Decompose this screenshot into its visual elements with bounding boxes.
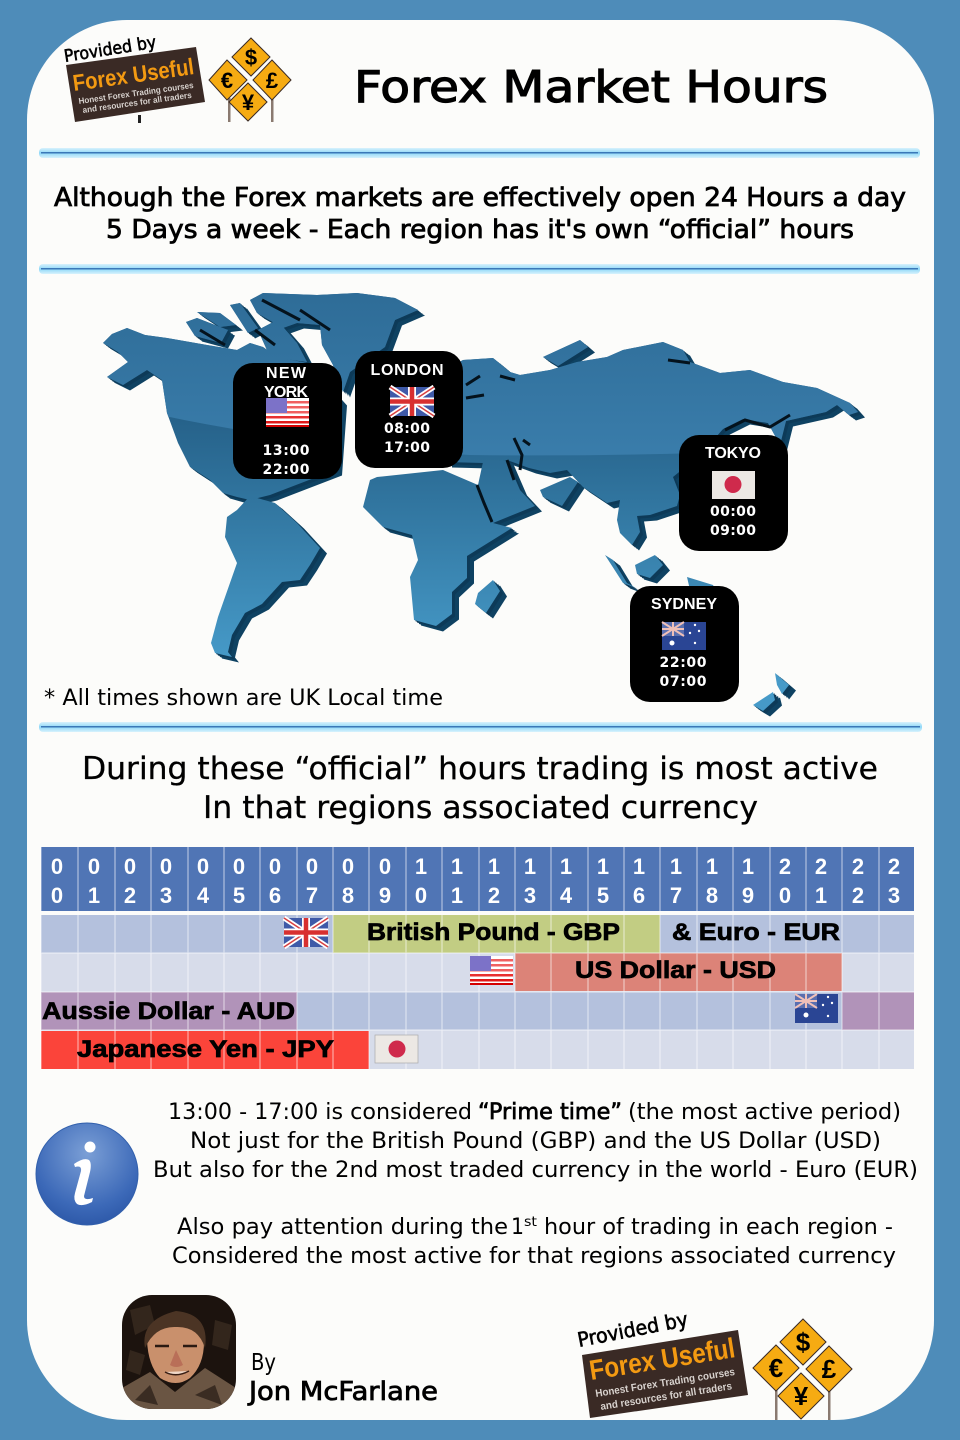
section heading: During these “official” hours trading is most active <box>82 751 878 787</box>
header row: 0 <box>233 854 245 879</box>
logo: Forex Useful bottom: € <box>769 1353 783 1383</box>
city card: New York: YORK <box>264 384 308 401</box>
city card: New York: 22:00 <box>262 462 310 478</box>
icon: information <box>36 1123 138 1225</box>
flag: USA <box>266 398 309 427</box>
author credit <box>247 1350 438 1407</box>
logo: Forex Useful bottom: and resources for all traders <box>600 1380 733 1413</box>
title: Forex Market Hours <box>354 62 828 113</box>
header row: 0 <box>269 854 281 879</box>
flag: Japan <box>712 471 755 499</box>
info text: Not just for the British Pound (GBP) and the US Dollar (USD) <box>190 1129 881 1154</box>
city card: New York <box>233 363 342 479</box>
label: EUR: & Euro - EUR <box>672 919 840 946</box>
header row: 0 <box>306 854 318 879</box>
author credit: Jon McFarlane <box>247 1377 438 1407</box>
trading hours chart <box>41 847 914 1069</box>
header row: 1 <box>597 854 609 879</box>
header row: 1 <box>633 854 645 879</box>
logo: Forex Useful top: ¥ <box>242 90 255 115</box>
header row: 3 <box>160 883 172 908</box>
author photo <box>122 1295 236 1409</box>
header row: 2 <box>779 854 791 879</box>
label: USD: US Dollar - USD <box>575 957 776 984</box>
flag: USA row <box>470 956 513 985</box>
logo: Forex Useful bottom: ¥ <box>794 1381 809 1411</box>
info text: “Prime time” <box>478 1100 622 1125</box>
info text: 13:00 - 17:00 is considered <box>168 1100 472 1125</box>
logo: Forex Useful top: Provided by <box>63 33 158 67</box>
city card: London: LONDON <box>370 362 444 379</box>
row backgrounds and bars <box>41 915 914 1069</box>
info text: st <box>524 1215 537 1230</box>
header row: 2 <box>124 883 136 908</box>
header row: 5 <box>233 883 245 908</box>
label: AUD: Aussie Dollar - AUD <box>42 998 295 1025</box>
header row: 0 <box>124 854 136 879</box>
header row: 0 <box>779 883 791 908</box>
divider two <box>39 264 920 274</box>
logo: Forex Useful top: $ <box>245 45 257 70</box>
label: JPY: Japanese Yen - JPY <box>77 1036 334 1063</box>
header row <box>41 847 914 911</box>
header row: 1 <box>451 854 463 879</box>
city card: London <box>355 351 463 468</box>
author credit: By <box>251 1350 276 1376</box>
header row: 9 <box>742 883 754 908</box>
logo: Forex Useful bottom <box>575 1307 852 1420</box>
world map <box>103 293 865 716</box>
logo: Forex Useful top: Honest Forex Trading courses <box>78 80 194 106</box>
header row: 1 <box>742 854 754 879</box>
header row: 7 <box>306 883 318 908</box>
logo: Forex Useful bottom: £ <box>822 1354 837 1384</box>
header row: 8 <box>342 883 354 908</box>
info text: Also pay attention during the <box>177 1215 508 1240</box>
header row: 1 <box>488 854 500 879</box>
logo: Forex Useful top <box>63 33 291 123</box>
header row: 2 <box>852 883 864 908</box>
header row: 2 <box>852 854 864 879</box>
header row: 4 <box>197 883 210 908</box>
header row: 1 <box>88 883 100 908</box>
header row: 3 <box>888 883 900 908</box>
header row: 1 <box>670 854 682 879</box>
flag: UK <box>390 387 434 416</box>
city card: London: 08:00 <box>384 421 430 437</box>
header row: 3 <box>524 883 536 908</box>
flag: Australia <box>662 622 706 650</box>
city card: Sydney: 07:00 <box>660 674 707 690</box>
city card: Tokyo: 09:00 <box>710 523 756 539</box>
header row: 0 <box>342 854 354 879</box>
city card: Sydney: SYDNEY <box>651 596 717 613</box>
header row: 2 <box>815 854 827 879</box>
header row: 1 <box>451 883 463 908</box>
flag: UK row <box>284 918 328 947</box>
flag: Japan row <box>375 1035 418 1063</box>
section heading <box>82 751 878 826</box>
header row: 5 <box>597 883 609 908</box>
header row: 0 <box>197 854 209 879</box>
header row: 1 <box>815 883 827 908</box>
header row: 1 <box>560 854 572 879</box>
intro text: 5 Days a week - Each region has it's own “official” hours <box>106 215 854 245</box>
header row: 2 <box>888 854 900 879</box>
city card: Sydney: 22:00 <box>660 655 707 671</box>
header row: 8 <box>706 883 718 908</box>
section heading: In that regions associated currency <box>203 790 758 826</box>
header row: 0 <box>415 883 427 908</box>
header row: 6 <box>633 883 645 908</box>
info text <box>153 1100 918 1269</box>
info text: But also for the 2nd most traded currency in the world - Euro (EUR) <box>153 1158 918 1183</box>
intro text: Although the Forex markets are effectively open 24 Hours a day <box>54 183 906 213</box>
grid lines <box>41 847 914 1069</box>
city card: Tokyo <box>679 435 788 551</box>
info text: (the most active period) <box>628 1100 901 1125</box>
divider one <box>39 148 920 158</box>
header row: 1 <box>706 854 718 879</box>
logo: Forex Useful bottom: Honest Forex Trading courses <box>595 1366 736 1400</box>
header row: 6 <box>269 883 281 908</box>
header row: 0 <box>51 883 63 908</box>
logo: Forex Useful top: and resources for all traders <box>82 90 192 115</box>
header row: 0 <box>88 854 100 879</box>
logo: Forex Useful top: Forex Useful <box>71 53 196 96</box>
city card: New York: 13:00 <box>262 443 310 459</box>
city card: Tokyo: TOKYO <box>705 445 761 462</box>
city card: Sydney <box>630 586 739 702</box>
logo: Forex Useful bottom: $ <box>796 1327 811 1357</box>
header row: 1 <box>524 854 536 879</box>
header row: 7 <box>670 883 682 908</box>
city card: New York: NEW <box>266 365 307 382</box>
info text: Considered the most active for that regions associated currency <box>172 1244 896 1269</box>
logo: Forex Useful bottom: Provided by <box>575 1307 690 1352</box>
city card: London: 17:00 <box>384 440 430 456</box>
logo: Forex Useful bottom: Forex Useful <box>587 1332 737 1386</box>
header row: 2 <box>488 883 500 908</box>
header row: 4 <box>560 883 573 908</box>
logo: Forex Useful top: £ <box>266 68 279 93</box>
label: GBP: British Pound - GBP <box>367 919 620 946</box>
header row: 0 <box>51 854 63 879</box>
divider three <box>39 722 922 732</box>
footnote: * All times shown are UK Local time <box>44 686 443 711</box>
header row: 1 <box>415 854 427 879</box>
info text: 1 <box>511 1215 524 1240</box>
header row: 9 <box>379 883 391 908</box>
city card: Tokyo: 00:00 <box>710 504 756 520</box>
logo: Forex Useful top: € <box>221 68 233 93</box>
intro text <box>54 183 906 245</box>
header row: 0 <box>379 854 391 879</box>
info text: hour of trading in each region - <box>544 1215 893 1240</box>
flag: Australia row <box>795 994 838 1023</box>
header row: 0 <box>160 854 172 879</box>
